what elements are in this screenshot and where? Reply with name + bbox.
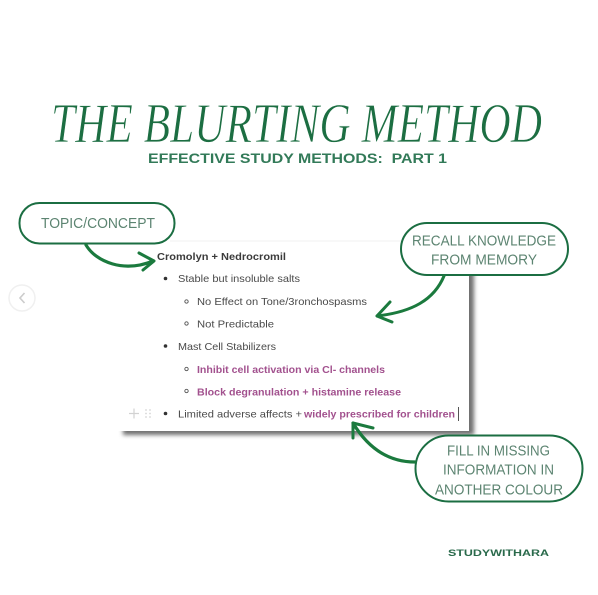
icon: add block [129, 408, 139, 418]
arrow: topic to heading [86, 245, 154, 270]
callout: fill in missing information: ANOTHER COLOUR [435, 482, 563, 498]
callout: recall knowledge: RECALL KNOWLEDGE [412, 232, 556, 250]
callout: topic/concept: TOPIC/CONCEPT [41, 215, 155, 232]
callout: fill in missing information: INFORMATION IN [443, 462, 554, 478]
callout: recall knowledge [401, 223, 568, 275]
callout: recall knowledge: FROM MEMORY [431, 252, 537, 268]
note list: Inhibit cell activation via Cl- channels [197, 364, 385, 376]
arrow: fill-in to purple text [353, 423, 415, 462]
subtitle: EFFECTIVE STUDY METHODS: PART 1 [148, 151, 448, 166]
callout: topic/concept [20, 203, 174, 244]
note list [164, 273, 455, 420]
note list: Block degranulation + histamine release [197, 386, 401, 398]
note list: Limited adverse affects + [178, 408, 302, 420]
note heading: Cromolyn + Nedrocromil [157, 251, 286, 263]
icon: drag handle [145, 409, 151, 418]
credit: STUDYWITHARA [448, 548, 549, 559]
callout: fill in missing information: FILL IN MISSING [447, 442, 550, 460]
note list: Mast Cell Stabilizers [178, 341, 276, 353]
text cursor [458, 407, 460, 421]
panel: notes card [116, 241, 474, 435]
note list: Stable but insoluble salts [178, 273, 300, 285]
note list: widely prescribed for children [303, 408, 455, 420]
note list: Not Predictable [197, 318, 274, 330]
note list: No Effect on Tone/3ronchospasms [197, 296, 367, 308]
carousel back button [9, 285, 35, 311]
callout: fill in missing information [416, 436, 582, 502]
arrow: recall to list [377, 276, 444, 322]
